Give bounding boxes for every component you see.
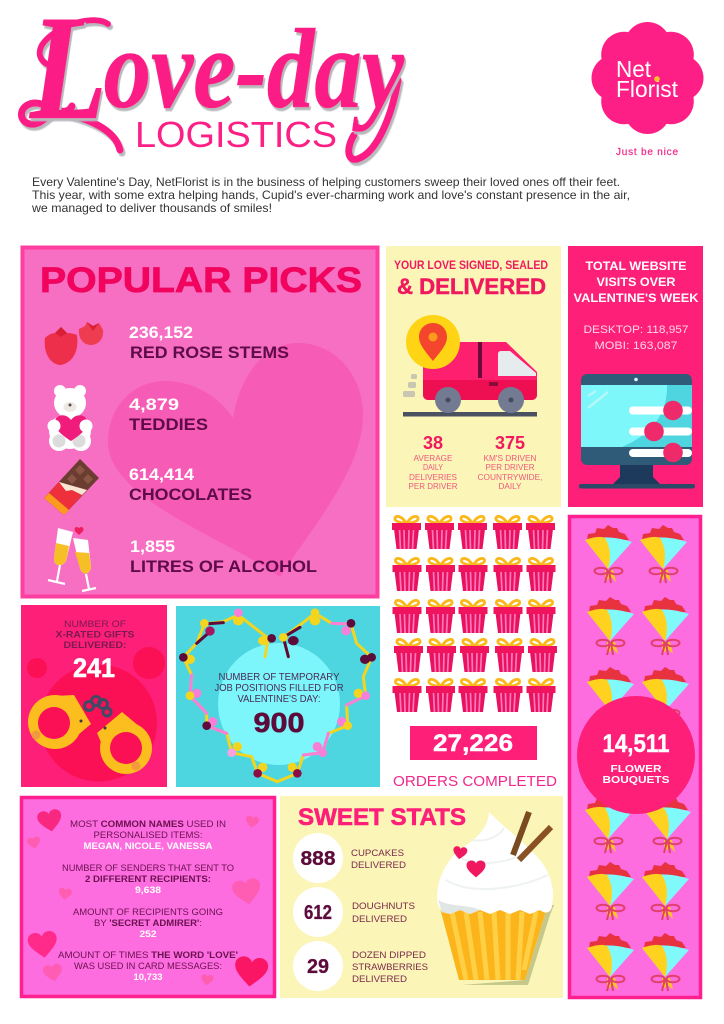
text: JOB POSITIONS FILLED FOR <box>214 683 344 694</box>
stat: km driven: 375 <box>495 433 525 453</box>
stat: cupcakes: 888 <box>300 848 336 870</box>
word love: 10,733 <box>134 972 162 982</box>
orders label: ORDERS COMPLETED <box>393 773 557 790</box>
stat: red roses: 236,152 <box>129 323 193 342</box>
stat: deliveries: DELIVERIES <box>409 472 457 482</box>
panel: x-rated gifts <box>21 605 167 787</box>
word love: WAS USED IN CARD MESSAGES: <box>74 961 222 971</box>
text: DELIVERED: <box>64 640 126 650</box>
secret admirer: 252 <box>140 929 156 939</box>
senders <box>62 863 234 895</box>
visit figures <box>584 324 688 352</box>
logo small flower <box>654 76 660 82</box>
stat: chocolates: CHOCOLATES <box>129 486 252 504</box>
visit figures: DESKTOP: 118,957 <box>584 324 688 336</box>
secret admirer: BY 'SECRET ADMIRER' : <box>94 918 202 928</box>
stat: km driven <box>478 433 542 491</box>
heading: SWEET STATS <box>298 804 466 831</box>
icon: delivery van <box>403 315 537 416</box>
stat: km driven: COUNTRYWIDE, <box>478 472 542 482</box>
heading <box>574 261 699 305</box>
stat: cupcakes: CUPCAKES <box>351 848 404 858</box>
stat: red roses: RED ROSE STEMS <box>130 344 289 362</box>
text: X-RATED GIFTS <box>56 630 134 640</box>
heading: POPULAR PICKS <box>40 261 362 300</box>
stat: km driven: KM'S DRIVEN <box>484 453 536 463</box>
stat: deliveries: 38 <box>423 433 443 453</box>
panel: names and messages <box>22 798 274 996</box>
logo wordmark: Florist <box>616 76 679 102</box>
icon: champagne glasses <box>48 527 96 591</box>
stat: strawberries: STRAWBERRIES <box>352 962 428 972</box>
stat: strawberries: DELIVERED <box>352 974 407 984</box>
bouquet count circle: BOUQUETS <box>602 774 670 786</box>
word love <box>58 950 238 982</box>
intro paragraph: This year, with some extra helping hands, Cupid's ever-charming work and love's constant presence in the air, <box>32 188 630 202</box>
senders: 2 DIFFERENT RECIPIENTS: <box>85 874 211 884</box>
heading: VISITS OVER <box>596 277 676 289</box>
secret admirer <box>73 907 223 939</box>
stat: deliveries: AVERAGE <box>414 453 453 463</box>
logo flower shape <box>592 22 704 134</box>
bouquet icons <box>585 525 691 991</box>
gift icon grid <box>392 516 557 712</box>
bouquet count circle: FLOWER <box>610 763 662 775</box>
panel: sweet stats <box>280 796 563 998</box>
logo wordmark: Net <box>616 56 652 82</box>
common names: PERSONALISED ITEMS: <box>94 830 202 840</box>
stat: cupcakes <box>293 833 406 883</box>
panel: flower bouquets <box>570 516 700 998</box>
stat: deliveries: PER DRIVER <box>408 481 458 491</box>
title script text: ove-day <box>104 6 405 132</box>
icon: cupcake <box>437 812 554 985</box>
stat: km driven: DAILY <box>498 481 522 491</box>
secret admirer: AMOUNT OF RECIPIENTS GOING <box>73 907 223 917</box>
visit figures: MOBI: 163,087 <box>594 340 678 352</box>
heading <box>394 260 548 299</box>
panel: popular picks <box>22 248 378 596</box>
heading: TOTAL WEBSITE <box>586 261 687 273</box>
text: VALENTINE'S DAY: <box>238 694 320 705</box>
text: NUMBER OF <box>64 619 126 629</box>
stat: teddies: TEDDIES <box>129 416 208 434</box>
stat: strawberries: DOZEN DIPPED <box>352 950 426 960</box>
stat: doughnuts: 612 <box>304 902 332 924</box>
intro paragraph: we managed to deliver thousands of smiles! <box>31 201 272 215</box>
panel: signed sealed delivered <box>386 246 561 507</box>
icon: monitor <box>579 374 695 488</box>
bouquet count circle <box>577 696 695 814</box>
intro paragraph <box>31 175 630 215</box>
stat: teddies <box>129 395 208 434</box>
icon: teddy <box>48 385 92 451</box>
stat: strawberries: 29 <box>307 956 329 978</box>
number 241: 241 <box>73 653 115 683</box>
stat: deliveries <box>408 433 458 491</box>
decorative hearts <box>26 808 269 988</box>
senders: NUMBER OF SENDERS THAT SENT TO <box>62 863 234 873</box>
orders count <box>410 726 537 760</box>
stat: doughnuts <box>293 887 415 937</box>
number 900: 900 <box>254 707 304 738</box>
icon: chocolate bar <box>44 459 99 515</box>
panel: website visits <box>568 246 703 507</box>
stat: red roses <box>129 323 289 362</box>
stat: chocolates: 614,414 <box>129 465 195 484</box>
text <box>214 672 344 705</box>
word love: AMOUNT OF TIMES THE WORD 'LOVE' <box>58 950 238 960</box>
orders count: 27,226 <box>433 730 513 757</box>
stat: chocolates <box>129 465 252 504</box>
stat: alcohol <box>130 537 317 576</box>
heading: & DELIVERED <box>397 274 546 299</box>
title subtitle: LOGISTICS <box>135 114 337 155</box>
common names: MEGAN, NICOLE, VANESSA <box>84 841 213 851</box>
heading: YOUR LOVE SIGNED, SEALED <box>394 260 548 272</box>
stat: alcohol: LITRES OF ALCOHOL <box>130 558 317 576</box>
logo wordmark <box>616 56 679 102</box>
panel: temporary jobs <box>176 606 380 787</box>
common names <box>70 819 226 851</box>
stat: doughnuts: DELIVERED <box>352 914 407 924</box>
stat: teddies: 4,879 <box>129 395 179 414</box>
text: NUMBER OF TEMPORARY <box>218 672 340 683</box>
stat: km driven: PER DRIVER <box>486 462 534 472</box>
stat: alcohol: 1,855 <box>130 537 175 556</box>
tagline: Just be nice <box>616 147 678 158</box>
icon: roses <box>45 322 103 365</box>
stat: doughnuts: DOUGHNUTS <box>352 901 415 911</box>
intro paragraph: Every Valentine's Day, NetFlorist is in the business of helping customers sweep their loved ones off their feet. <box>32 175 620 189</box>
heading: VALENTINE'S WEEK <box>574 293 699 305</box>
stat: cupcakes: DELIVERED <box>351 860 406 870</box>
heart of people holding hands <box>179 608 376 782</box>
stat: strawberries <box>293 941 428 991</box>
icon: handcuffs <box>28 695 152 774</box>
senders: 9,638 <box>135 885 161 895</box>
logo: NetFlorist flower <box>592 22 704 158</box>
common names: MOST COMMON NAMES USED IN <box>70 819 226 829</box>
title: Love-day Logistics <box>21 0 405 159</box>
stat: deliveries: DAILY <box>423 462 443 472</box>
background heart <box>108 343 363 577</box>
bouquet count circle: 14,511 <box>602 730 670 758</box>
title script flourishes <box>21 20 398 159</box>
text <box>56 619 134 650</box>
